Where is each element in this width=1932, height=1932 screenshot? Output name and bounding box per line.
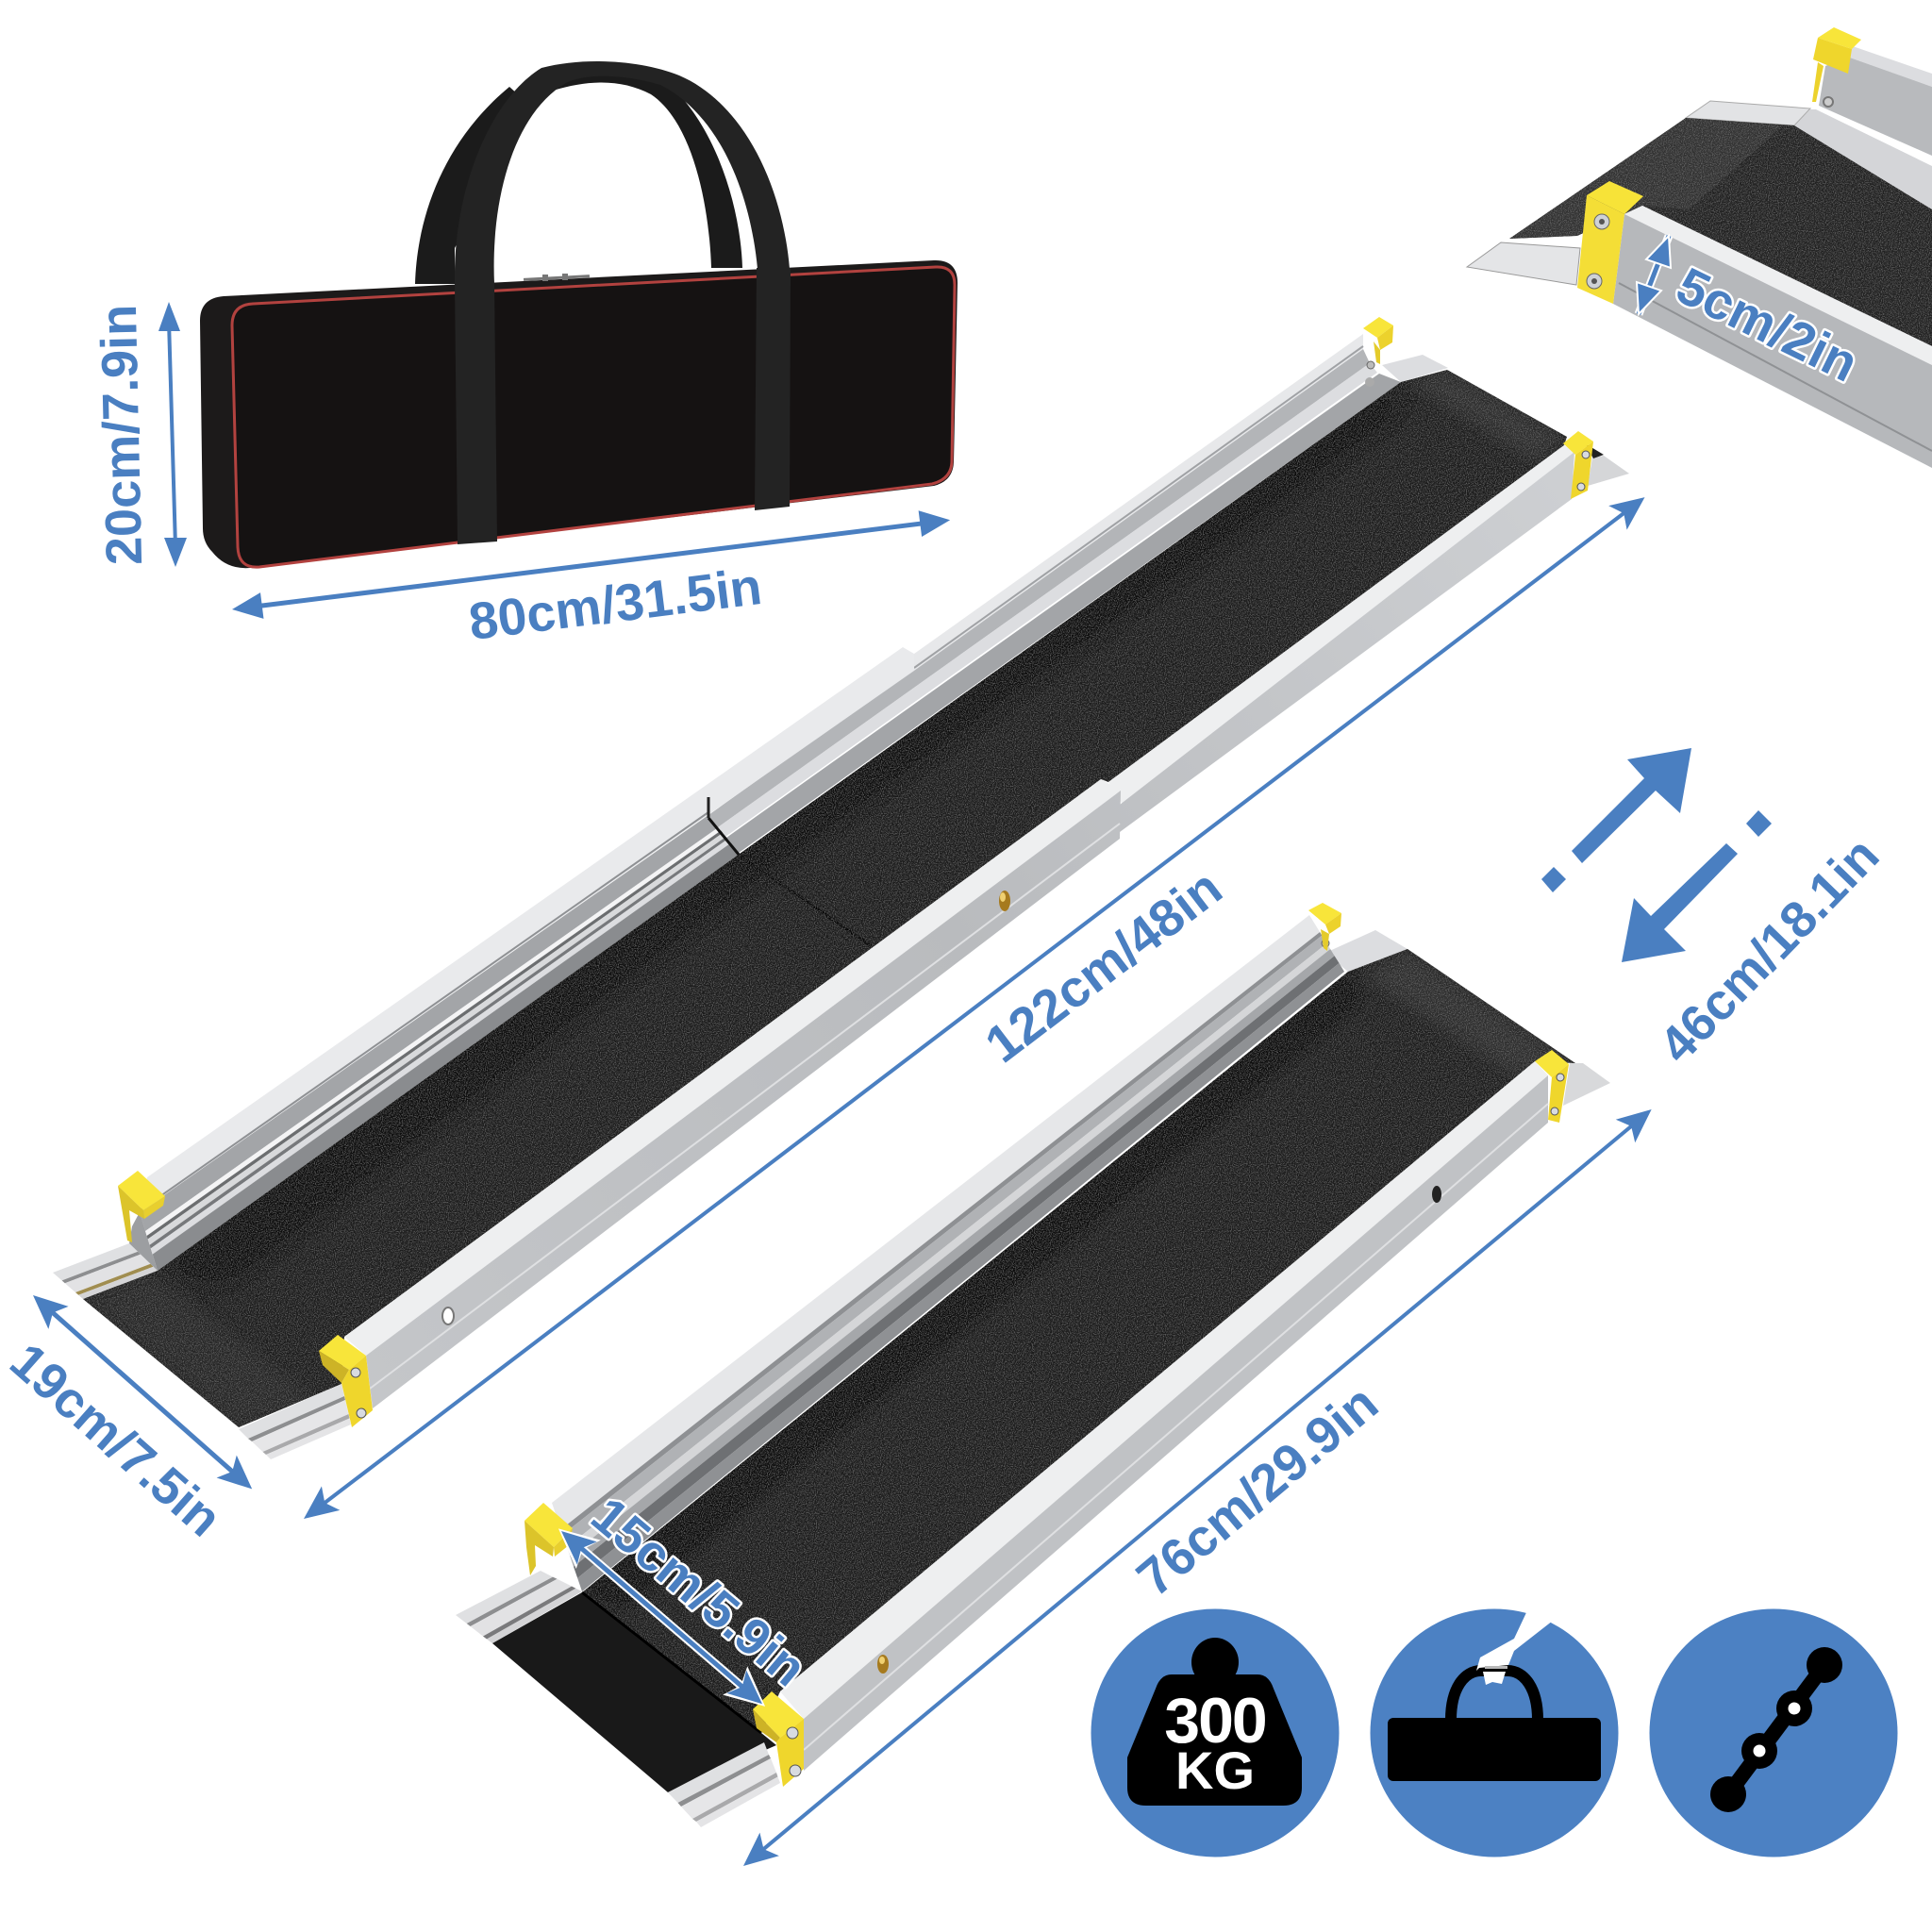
bag back handle right arm (553, 73, 742, 268)
detail mat (1509, 118, 1932, 346)
badge: 300 kg load: KG (1175, 1740, 1255, 1800)
dimension: inner width: 15cm/5.9in (581, 1487, 817, 1697)
front flap right end (1563, 1063, 1610, 1106)
icon: hand (1476, 1607, 1553, 1685)
dimension: telescoping travel: 46cm/18.1in (1649, 826, 1890, 1074)
icon: bag handle (1451, 1671, 1538, 1720)
detail front flap (1467, 242, 1580, 285)
back rail bands (552, 915, 1344, 1591)
non-slip mat (83, 370, 1567, 1427)
dimension: bag height (91, 302, 187, 567)
dot: collapse (1746, 810, 1772, 837)
left strap (455, 283, 497, 544)
front flap left end (668, 1742, 780, 1827)
back flap left end (456, 1571, 582, 1643)
front rail (344, 445, 1574, 1408)
arrow: collapse (1622, 843, 1738, 962)
detail back rail (1794, 45, 1932, 209)
extended ramp (53, 317, 1629, 1459)
detail yellow cap back (1812, 27, 1861, 102)
bag with handles (200, 61, 958, 568)
non-slip mat (582, 949, 1575, 1733)
bag case (200, 260, 958, 568)
dimension: collapsed length (734, 1098, 1661, 1877)
bag front handle (455, 61, 790, 284)
dot: extend (1541, 867, 1566, 892)
dimension: bag height: 20cm/7.9in (91, 304, 153, 566)
detail label: 5cm/2in (1668, 256, 1867, 393)
upper section rail bands (708, 334, 1401, 853)
front rail (780, 1061, 1548, 1771)
detail height arrow (1637, 236, 1671, 314)
back flap left end (53, 1212, 158, 1299)
dimension: outer width: 19cm/7.5in (0, 1333, 232, 1547)
collapsed ramp (456, 903, 1610, 1827)
detail back flap (1686, 101, 1810, 125)
rail holes (877, 1186, 1441, 1674)
badge: 300 kg load (1091, 1609, 1340, 1857)
telescoping arrows (1541, 748, 1772, 962)
bag red piping panel (232, 267, 955, 567)
right strap (755, 268, 791, 510)
icon: bag body (1388, 1718, 1601, 1781)
dimension: bag width (230, 507, 952, 651)
lower section rail bands (140, 647, 914, 1271)
dimension: bag width: 80cm/31.5in (466, 557, 765, 651)
dimension: extended length: 122cm/48in (974, 858, 1232, 1074)
front flap left end (239, 1384, 351, 1459)
lower mat section (492, 1592, 776, 1792)
yellow end caps (525, 903, 1569, 1787)
front flap right end (1588, 456, 1629, 486)
back flap right end (1325, 930, 1407, 972)
dimension: extended length (294, 485, 1654, 1531)
yellow end caps (118, 317, 1593, 1427)
badge: 300 kg load: 300 (1164, 1685, 1266, 1757)
detail front rail (1613, 206, 1932, 468)
arrow: extend (1572, 748, 1691, 863)
zip pull (524, 274, 590, 281)
badge: adjustable length (1649, 1609, 1898, 1857)
bag back handle left arm (415, 87, 528, 284)
badge: carry bag (1370, 1607, 1619, 1857)
rail holes (442, 891, 1010, 1324)
dimension: collapsed length: 76cm/29.9in (1125, 1374, 1389, 1607)
detail view: rail height (1467, 27, 1932, 468)
detail yellow cap front (1577, 181, 1643, 304)
back flap right end (1382, 355, 1448, 382)
